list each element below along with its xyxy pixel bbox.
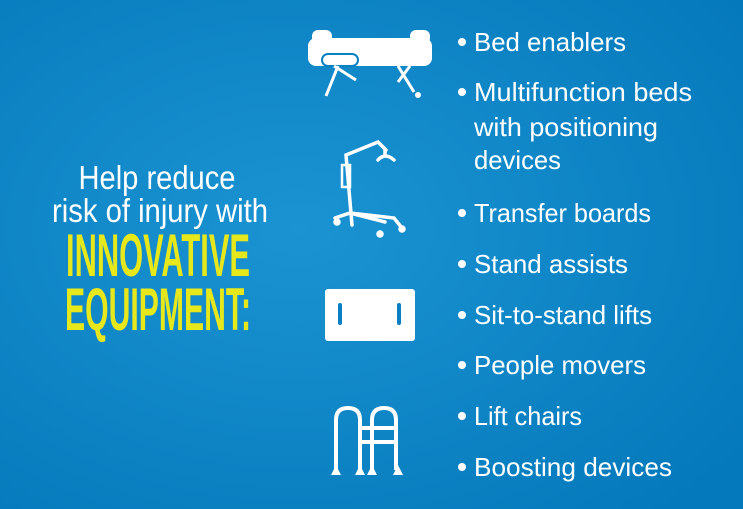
icon: patient lift — [335, 142, 404, 236]
list: People movers — [474, 350, 646, 380]
list: Lift chairs — [474, 401, 582, 431]
title: risk of injury with — [52, 192, 268, 229]
title: EQUIPMENT: — [65, 276, 251, 343]
list: devices — [474, 145, 561, 175]
list: Transfer boards — [474, 198, 651, 228]
list: Multifunction beds — [474, 77, 692, 107]
title: Help reduce — [78, 159, 236, 196]
title: INNOVATIVE — [66, 222, 250, 289]
list: with positioning — [473, 112, 658, 142]
list: Sit-to-stand lifts — [474, 300, 652, 330]
icon: transfer board — [325, 289, 415, 341]
icon: walker — [331, 408, 403, 475]
list: Stand assists — [474, 249, 628, 279]
list — [458, 27, 692, 482]
list: Bed enablers — [474, 27, 626, 57]
list: Boosting devices — [474, 452, 672, 482]
title — [52, 159, 268, 343]
icon: bed — [308, 30, 432, 98]
